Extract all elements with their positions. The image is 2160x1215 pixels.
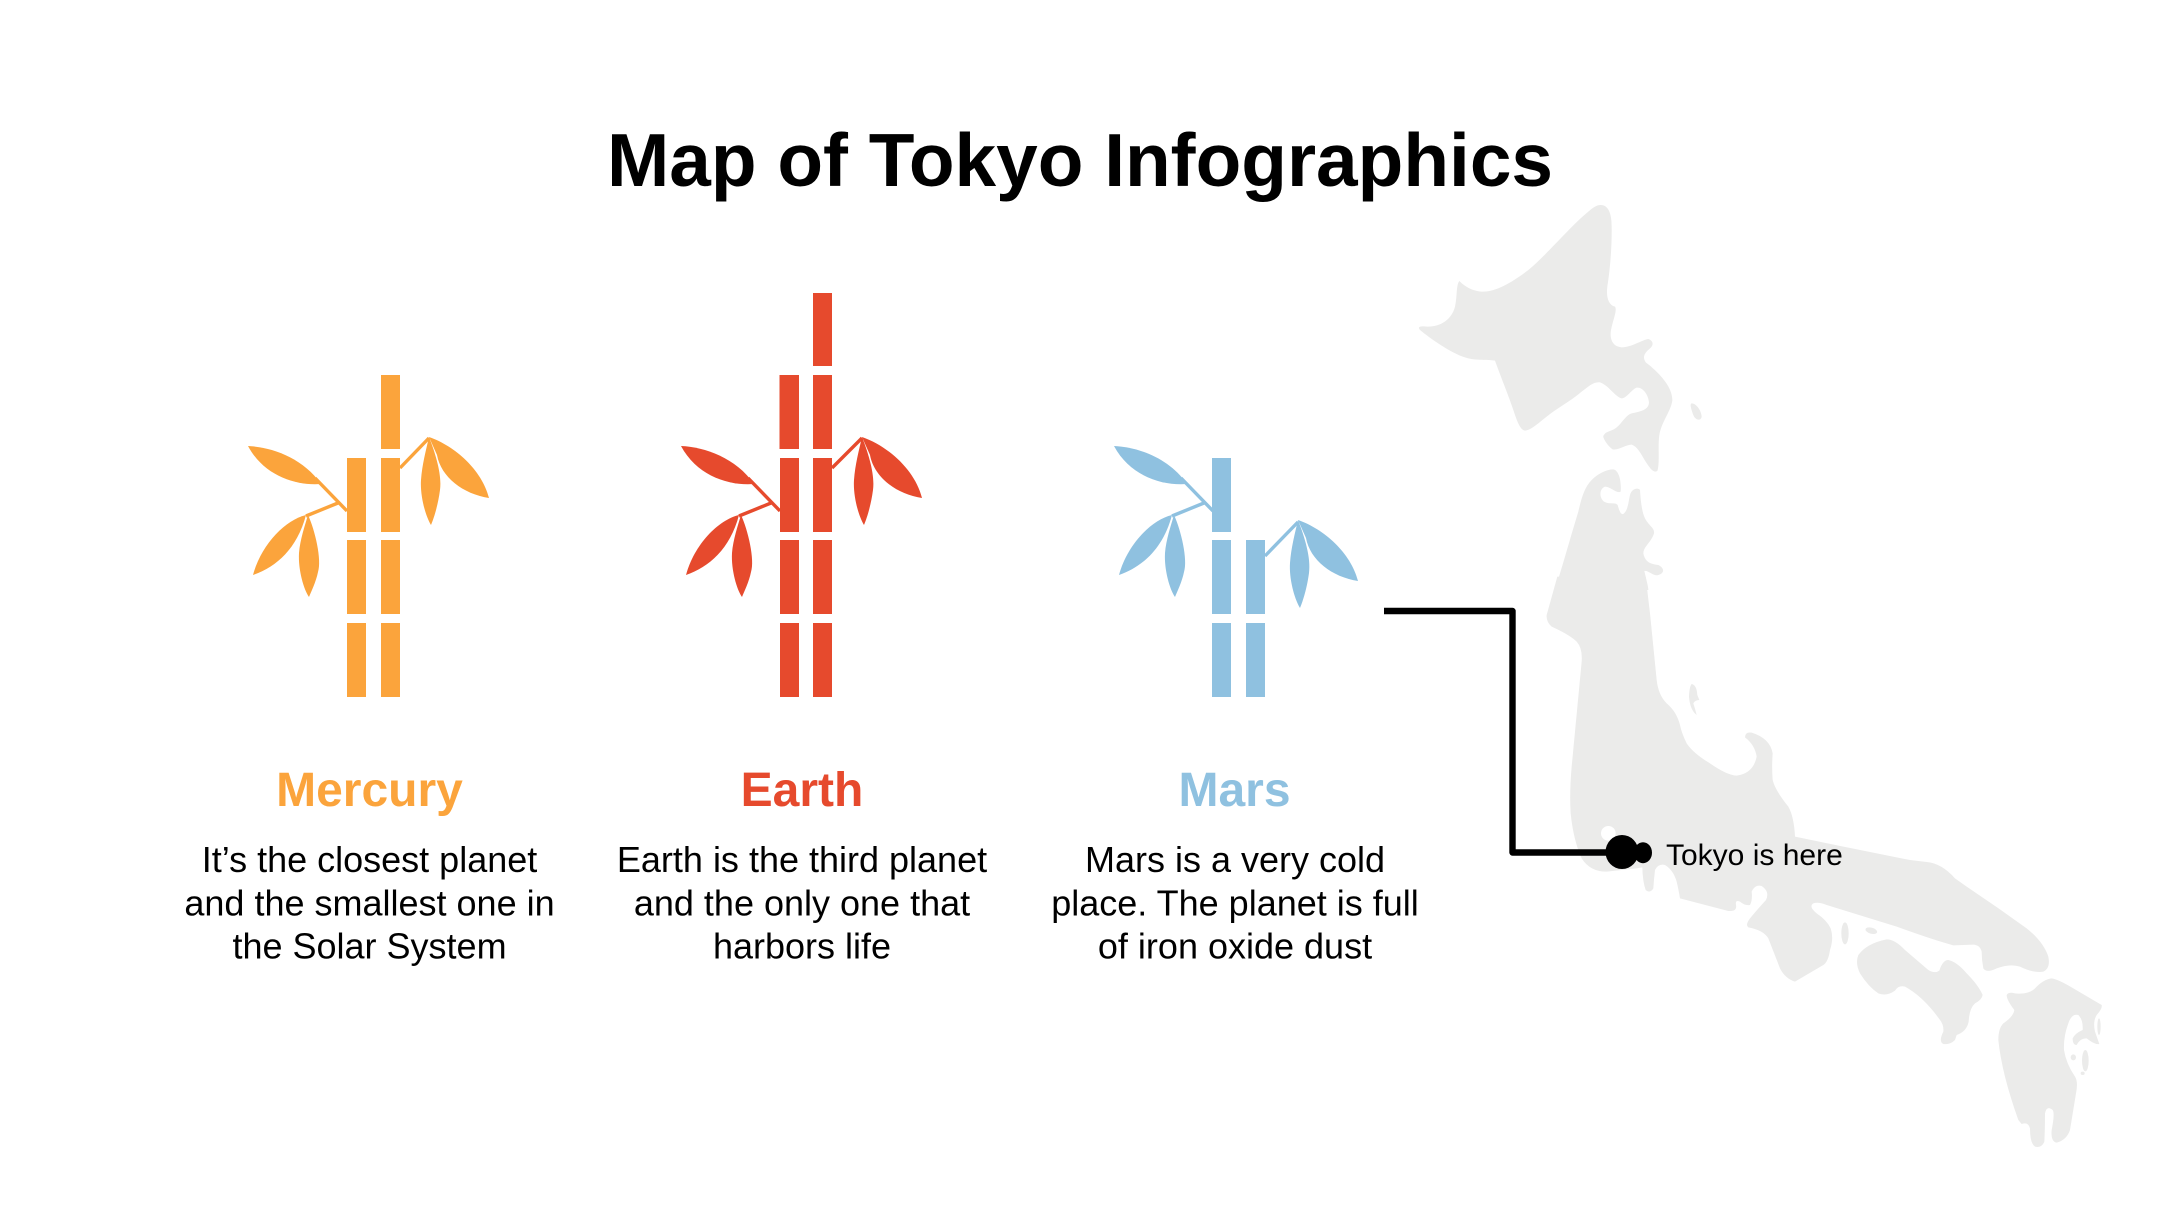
text: Mars description: Mars is a very cold (1085, 839, 1385, 880)
marker: Tokyo location (1606, 835, 1652, 869)
connector arrow from Mars to Tokyo (1384, 611, 1612, 852)
text: Mercury description: the Solar System (232, 926, 507, 966)
map of Japan (1419, 205, 2102, 1147)
panel: Mars (1051, 446, 1419, 966)
island: central Honshu (1547, 577, 2049, 982)
icon: red bamboo (681, 293, 922, 697)
text: Mars description: of iron oxide dust (1098, 926, 1372, 966)
title: Map of Tokyo Infographics (607, 118, 1553, 202)
island: northern Honshu (1555, 469, 1663, 590)
island: Shikoku and small islands (1841, 922, 1983, 1044)
text: Mercury description: It’s the closest planet (202, 839, 537, 880)
text: Earth description: Earth is the third planet (617, 839, 987, 880)
island: Hokkaido (1419, 205, 1702, 472)
panel: Mercury (184, 375, 555, 966)
heading: Mars: Mars (1178, 764, 1291, 817)
label: Tokyo is here: Tokyo is here (1666, 839, 1843, 872)
text: Earth description: and the only one that (634, 882, 970, 924)
text: Mercury description: and the smallest one in (184, 882, 555, 924)
text: Mars description: place. The planet is full (1051, 882, 1419, 924)
panel: Earth (617, 293, 987, 966)
icon: blue bamboo (1114, 446, 1358, 697)
heading: Mercury: Mercury (276, 764, 463, 817)
island: Kyushu (1998, 978, 2102, 1147)
heading: Earth: Earth (741, 764, 863, 817)
text: Earth description: harbors life (713, 926, 891, 966)
icon: orange bamboo (248, 375, 489, 697)
